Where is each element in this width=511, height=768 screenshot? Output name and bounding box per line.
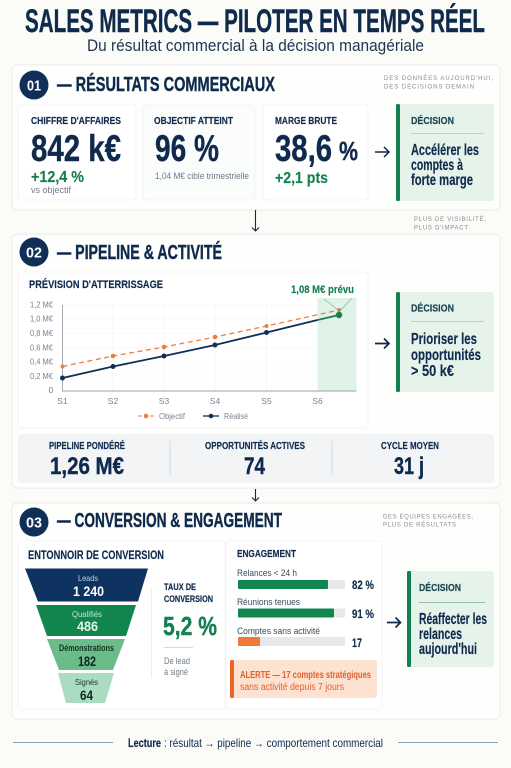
tagline: équipes: [383, 514, 473, 528]
card: marge brute: 38,6: [275, 128, 332, 169]
arrow down 2: [252, 489, 259, 501]
decision box 1: forte marge: [411, 172, 473, 189]
bar: comptes sans activité: [237, 626, 362, 650]
bar: réunions: Réunions tenues: [237, 597, 300, 608]
funnel: leads: Leads: [78, 573, 98, 583]
legend: Réalisé: [224, 411, 248, 421]
bar: relances: [237, 568, 374, 592]
card: entonnoir de conversion: ENTONNOIR DE CONVERSION: [28, 550, 164, 562]
x axis labels: S1: [57, 396, 68, 406]
card: marge brute: MARGE BRUTE: [275, 116, 337, 127]
x axis labels: S5: [261, 396, 272, 406]
decision box 2: Prioriser les: [411, 331, 477, 348]
conversion rate: CONVERSION: [164, 594, 213, 605]
funnel: démonstrations: Démonstrations: [59, 643, 114, 653]
card: entonnoir de conversion: [18, 541, 225, 709]
x axis labels: S4: [210, 396, 220, 406]
decision box 1: [396, 104, 494, 201]
conversion rate: à signé: [164, 667, 188, 678]
panel: conversion et engagement: [12, 503, 500, 719]
card: objectif atteint: OBJECTIF ATTEINT: [154, 116, 233, 127]
decision box 3: relances: [419, 626, 462, 643]
alert: sans activité depuis 7 jours: [240, 682, 344, 693]
card: engagement: [226, 541, 382, 709]
heading: conversion et engagement: — CONVERSION & ENGAGEMENT: [57, 510, 282, 532]
decision box 2: > 50 k€: [411, 363, 454, 380]
card: chiffre d'affaires: CHIFFRE D'AFFAIRES: [31, 116, 121, 127]
tagline: visibilité: PLUS D'IMPACT: [414, 226, 468, 232]
heading: résultats commerciaux: — RÉSULTATS COMMERCIAUX: [57, 73, 275, 96]
conversion rate: De lead: [164, 656, 190, 667]
line chart card: prévision d'atterrissage: [18, 272, 368, 428]
footer: Lecture: [128, 736, 161, 750]
arrow down 1: [252, 210, 259, 231]
stat: opportunités actives: [205, 439, 305, 480]
panel: résultats commerciaux: [12, 65, 500, 210]
funnel: leads: 1 240: [73, 583, 104, 599]
footer: [13, 736, 498, 750]
badge 01: 01: [27, 78, 41, 94]
series: réalisé: [60, 312, 342, 380]
funnel: signés: [58, 673, 114, 703]
badge 03: [20, 508, 48, 536]
card: marge brute: +2,1 pts: [275, 170, 328, 187]
card: marge brute: %: [339, 136, 358, 166]
bar: réunions: [237, 597, 374, 621]
decision box 1: Accélérer les: [411, 142, 479, 159]
card: chiffre d'affaires: [18, 105, 136, 200]
y axis labels: 0,8 M€: [30, 328, 53, 338]
tagline: données: [384, 75, 493, 90]
bar: réunions: 91 %: [352, 609, 374, 621]
tagline: équipes: DES ÉQUIPES ENGAGÉES,: [383, 514, 473, 520]
y axis labels: 0,6 M€: [30, 342, 53, 352]
stat: cycle moyen: CYCLE MOYEN: [381, 441, 439, 452]
badge 03: 03: [26, 514, 42, 532]
tagline: données: DES DÉCISIONS DEMAIN: [384, 84, 474, 90]
decision box 2: DÉCISION: [411, 302, 454, 314]
funnel: démonstrations: 182: [78, 653, 96, 669]
y axis labels: 0,2 M€: [30, 371, 53, 381]
y axis labels: 0,4 M€: [30, 356, 53, 366]
y axis labels: 0: [48, 385, 54, 395]
decision box 1: comptes à: [411, 157, 463, 174]
tagline: visibilité: [414, 216, 486, 232]
card: marge brute: [263, 105, 368, 200]
decision box 2: [396, 292, 494, 392]
funnel: démonstrations: [47, 639, 125, 670]
bar: comptes sans activité: Comptes sans activité: [237, 626, 320, 637]
conversion rate: TAUX DE: [164, 582, 196, 593]
bar: relances: Relances < 24 h: [237, 568, 297, 579]
y axis labels: 1,2 M€: [30, 300, 53, 310]
decision box 3: [407, 571, 494, 667]
stat: cycle moyen: [381, 441, 439, 480]
funnel: qualifiés: [36, 605, 136, 636]
x axis labels: S3: [159, 396, 169, 406]
stats strip: [18, 434, 494, 483]
stat: cycle moyen: 31 j: [394, 453, 424, 480]
alert: ALERTE — 17 comptes stratégiques: [240, 670, 371, 681]
card: engagement: ENGAGEMENT: [237, 548, 296, 560]
y axis labels: 1,0 M€: [30, 314, 53, 324]
heading: pipeline et activité: — PIPELINE & ACTIVITÉ: [57, 241, 222, 264]
panel: pipeline et activité: [12, 234, 500, 488]
card: objectif atteint: [143, 105, 255, 200]
funnel: qualifiés: 486: [77, 618, 98, 634]
x axis labels: S6: [312, 396, 323, 406]
funnel: signés: 64: [80, 687, 93, 703]
x axis labels: S2: [108, 396, 118, 406]
card: chiffre d'affaires: vs objectif: [31, 185, 71, 196]
card: objectif atteint: 1,04 M€ cible trimestrielle: [155, 171, 249, 181]
alert: [230, 660, 377, 698]
bar: comptes sans activité: 17: [352, 638, 362, 650]
stat: pipeline pondéré: PIPELINE PONDÉRÉ: [49, 439, 125, 452]
decision box 3: aujourd'hui: [419, 641, 477, 658]
decision box 1: DÉCISION: [411, 114, 454, 127]
badge 01: [20, 70, 48, 100]
badge 02: 02: [26, 244, 42, 262]
line chart card: prévision d'atterrissage: PRÉVISION D'ATTERRISSAGE: [29, 278, 163, 291]
card: chiffre d'affaires: +12,4 %: [31, 169, 84, 186]
decision box 2: opportunités: [411, 347, 481, 364]
callout: 1,08 M€ prévu: 1,08 M€ prévu: [291, 284, 354, 296]
card: chiffre d'affaires: 842 k€: [31, 128, 121, 169]
arrow to décision 2: [375, 338, 389, 348]
decision box 3: DÉCISION: [419, 581, 461, 594]
stat: opportunités actives: 74: [244, 453, 266, 480]
arrow to décision 1: [375, 147, 389, 157]
subtitle: Du résultat commercial à la décision managériale: [87, 37, 424, 55]
tagline: visibilité: PLUS DE VISIBILITÉ,: [414, 216, 486, 223]
funnel: signés: Signés: [75, 677, 98, 687]
stat: opportunités actives: OPPORTUNITÉS ACTIVES: [205, 439, 305, 452]
card: objectif atteint: 96 %: [155, 128, 219, 169]
callout: 1,08 M€ prévu: [291, 284, 354, 311]
x axis labels: [57, 396, 323, 406]
conversion rate: 5,2 %: [163, 611, 217, 641]
arrow to décision 3: [387, 618, 400, 628]
y axis labels: [30, 300, 54, 395]
legend: Objectif: [159, 411, 186, 421]
stat: pipeline pondéré: [49, 439, 125, 480]
bar: relances: 82 %: [352, 580, 374, 592]
series: objectif: [60, 308, 341, 368]
footer: : résultat → pipeline → comportement commercial: [164, 736, 383, 750]
badge 02: [20, 238, 48, 266]
tagline: données: DES DONNÉES AUJOURD'HUI,: [384, 75, 493, 82]
stat: pipeline pondéré: 1,26 M€: [50, 453, 124, 480]
conversion rate: [163, 582, 217, 678]
funnel: leads: [25, 568, 148, 602]
tagline: équipes: PLUS DE RÉSULTATS: [383, 522, 456, 528]
legend: [138, 411, 248, 421]
funnel: qualifiés: Qualifiés: [72, 609, 102, 619]
